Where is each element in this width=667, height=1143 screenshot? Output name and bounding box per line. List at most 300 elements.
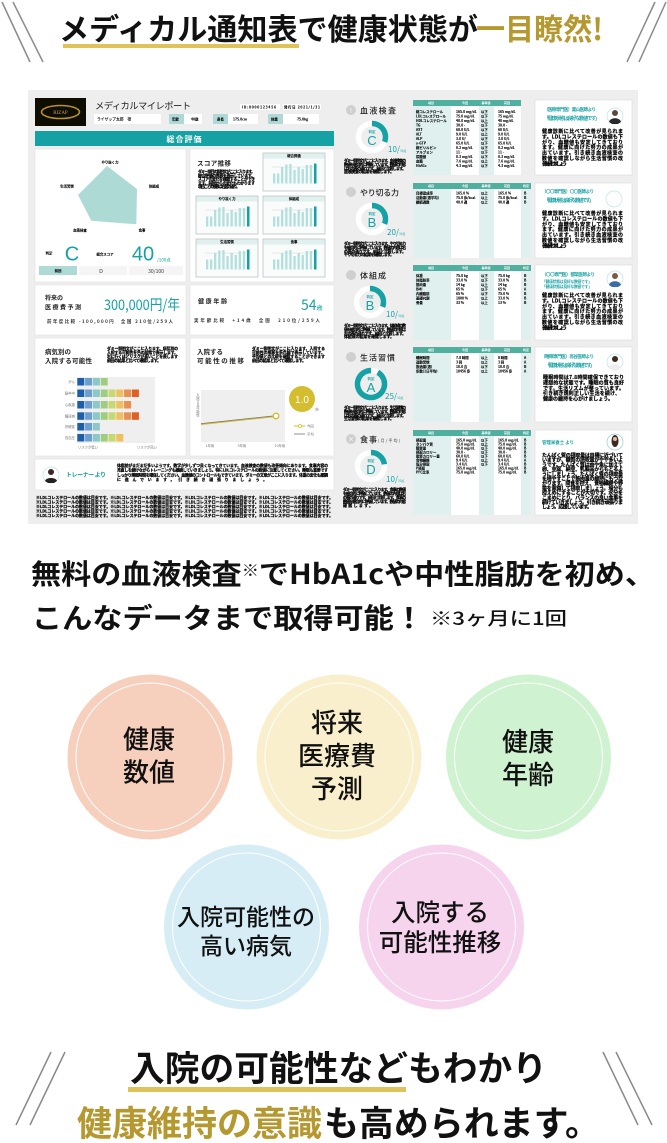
score: blood test: 10/30点 — [388, 144, 406, 155]
table: blood test: γ-GTP — [416, 140, 426, 146]
score: lifestyle: 生活習慣 — [360, 352, 395, 364]
table: blood test: HDLコレステロール — [416, 118, 447, 123]
table: body composition: 以上 — [481, 282, 488, 287]
report header: 40歳 — [191, 116, 199, 122]
table: blood test: 7.6 mg/dL — [498, 158, 515, 164]
table: blood test: TG — [416, 122, 420, 128]
table: body composition: 65 % — [456, 291, 465, 296]
score: lifestyle: 数値を総合的に評価しています。数値の内容 — [344, 409, 406, 415]
logo: RIZAP: RIZAP — [53, 111, 68, 116]
decorative slashes: bottom left — [16, 1052, 65, 1125]
row: blood test — [344, 100, 632, 175]
panel: hospitalization trend line chart — [190, 338, 334, 456]
table: blood test: 65.0 U/L — [456, 140, 470, 146]
table: diet: 9.4 U/L — [498, 458, 510, 462]
heading: closing message — [77, 1041, 600, 1143]
table: diet: 以下 — [481, 438, 488, 442]
doctor card: body composition — [535, 265, 632, 340]
panel: disease risk heat chart: 入院する可能性を色の段階で表示します。 — [107, 350, 178, 356]
score: grit — [344, 187, 406, 258]
table: grit: 以上 — [481, 190, 488, 196]
table: blood test: 65.0 U/L — [498, 140, 512, 146]
panel: hospitalization trend line chart: 5年後 — [238, 443, 247, 448]
text block: intro: 無料の血液検査 — [31, 553, 227, 593]
score: grit: やり切る力の結果を確認します。 — [344, 252, 394, 258]
doctor card: blood test: ます。健康に向けた努力の成果が — [542, 144, 623, 151]
table: lifestyle: 以上 — [481, 368, 488, 374]
table: lifestyle: B — [524, 364, 527, 369]
table: lifestyle — [413, 347, 531, 422]
table: blood test: 0.2 mg/dL — [456, 145, 473, 150]
table: body composition: 骨量 — [416, 300, 423, 305]
panel: future medical cost: 前年度比較 -100,000円 全国 210位/259人 — [47, 318, 174, 325]
doctor card: grit: す。LDLコレステロールの数値も下 — [542, 215, 623, 222]
table: lifestyle: 10.0 合 — [456, 364, 468, 369]
footnote text block: ※LDLコレステロールの数値は目安です。※LDLコレステロールの数値は目安です。※LDLコレステロールの数値は目安です。※LDLコレステロールの数値は目安です。 — [36, 500, 333, 506]
panel: hospitalization trend line chart: 今回 — [307, 423, 314, 428]
table: body composition: 体重 — [416, 273, 423, 278]
table: body composition: 以下 — [481, 278, 488, 282]
table: diet: 75.0 mg/dL — [498, 470, 517, 474]
text block: intro: ※3ヶ月に1回 — [430, 605, 567, 631]
table: body composition: 以下 — [481, 273, 488, 278]
table: body composition: 65 % — [498, 286, 507, 292]
table: grit: 今回 — [462, 183, 468, 188]
panel: hospitalization trend line chart: ダミー説明文がここに入ります。入院する — [252, 346, 325, 352]
panel: hospitalization trend line chart: 倍 — [315, 406, 319, 412]
table: body composition: 13 % — [498, 300, 507, 305]
panel: trainer comment: トレーナー より — [66, 470, 106, 479]
table: blood test: HbA1c — [416, 163, 427, 168]
table: blood test: アルブミン — [416, 150, 433, 154]
doctor card: body composition: がり、血糖値も安定してきており — [542, 303, 623, 310]
table: lifestyle: 歩数(1日平均) — [416, 368, 438, 374]
table: body composition: 今回 — [462, 265, 468, 270]
score: grit: ダミー説明文がここに入ります。やり切る力 — [344, 241, 406, 247]
doctor card: grit: 数値を確認しながら生活習慣の改 — [542, 237, 623, 244]
doctor card: diet: こまめにとり、バランスの良い食事を — [542, 494, 623, 501]
panel: radar chart: 30/100 — [148, 268, 164, 275]
table: blood test: 基準値 — [481, 100, 491, 105]
table: grit: 前回 — [504, 183, 510, 188]
score: grit: 20/30点 — [387, 227, 405, 238]
score: lifestyle: 生活習慣の結果を確認します。 — [344, 416, 394, 422]
table: body composition: 基礎代謝 — [416, 296, 430, 300]
score: blood test: は右の表の通りです。前回と比較します。 — [344, 166, 406, 172]
panel: score trend: 項目ごとの推移は右図の通り。 — [198, 184, 240, 190]
panel: radar chart: C — [65, 244, 79, 266]
doctor card: diet: 続けていきましょう。引き続き頑張りま — [542, 499, 623, 506]
doctor card: body composition: 数値を確認しながら生活習慣の改 — [542, 319, 623, 326]
table: body composition: 33.0 % — [498, 278, 510, 282]
score: grit: の表の通りです。前回と比較します。 — [344, 249, 406, 255]
decorative slashes: bottom right — [603, 1052, 652, 1125]
doctor card: diet: を増やすことで筋肉量の維持にもつな — [542, 476, 623, 482]
doctor card: lifestyle: 睡眠時間は7.8時間確保できており — [543, 374, 624, 381]
table: body composition: 以上 — [481, 296, 488, 300]
table: blood test: AST — [416, 127, 422, 132]
score: lifestyle: 判定 — [368, 376, 375, 382]
table: diet: 食物繊維 — [416, 458, 430, 462]
doctor card: lifestyle: 「健康状態は良好な数値です」 — [545, 362, 595, 369]
table: diet: 3.4 U/L — [456, 462, 468, 466]
score: blood test: C — [367, 133, 377, 148]
table: blood test: 総コレステロール — [416, 109, 443, 114]
panel: health age: 健康年齢 — [198, 296, 227, 306]
panel: disease risk heat chart: 心疾患 — [65, 402, 76, 407]
table: blood test: 以下 — [481, 109, 488, 114]
score: diet: (月/平均) — [378, 438, 400, 444]
table: body composition: B — [524, 273, 527, 278]
circle: high-risk diseases: 高い病気 — [200, 927, 292, 961]
panel: trainer comment: に進んでいます。引き続き頑張りましょう。 — [117, 477, 267, 483]
table: blood test: 血糖 — [416, 158, 423, 164]
table: body composition: A — [523, 286, 527, 292]
score: body composition: 値を総合的に評価しています。数値の内容は — [344, 327, 406, 333]
score: blood test: 判定 — [368, 129, 376, 135]
report header: 175.0cm — [233, 116, 247, 122]
panel: disease risk heat chart: ダミー説明文がここに入ります。病気別の — [107, 346, 178, 352]
circle: future medical cost prediction — [256, 674, 422, 840]
table: grit: 判定 — [523, 183, 529, 188]
doctor card: diet: いますが、糖質の摂取量がやや多いよ — [542, 457, 623, 464]
text block: intro: ※ — [242, 557, 259, 581]
score: lifestyle — [344, 352, 406, 422]
table: diet: 以上 — [481, 442, 488, 446]
table: blood test: 以下 — [481, 154, 488, 159]
panel: radar chart: 総合スコア — [97, 252, 114, 256]
table: diet: 以下 — [481, 454, 488, 458]
doctor card: lifestyle: です。生活リズムが整っています。 — [543, 385, 624, 392]
table: blood test: 0.3 mg/dL — [498, 154, 515, 159]
report header: 75.0kg — [297, 116, 308, 122]
table: diet: 9.4 U/L — [456, 458, 468, 462]
table: blood test: 165 mg/dL — [498, 109, 516, 114]
table: lifestyle: A — [523, 368, 527, 374]
report header: 年齢 — [172, 116, 179, 122]
table: blood test: 11 - — [456, 150, 463, 154]
panel: hospitalization trend line chart: 1年後 — [206, 443, 215, 448]
table: grit: 165.0 % — [498, 190, 512, 196]
doctor card: body composition: （〇〇専門医）都築医師より — [542, 271, 595, 278]
doctor card: diet: うです。たんぱく質は肉や魚に加えて — [542, 461, 623, 468]
circle: high-risk diseases: 入院可能性の — [177, 898, 315, 932]
panel: trainer comment: しっかり睡眠時間を確保してください。血糖値のコントロールもできています。ダミーの文章がここに入ります。体重の変化も順調 — [117, 472, 328, 478]
table: diet: 判定 — [523, 430, 529, 435]
report header: ID:0000123456 — [242, 104, 276, 109]
panel: disease risk heat chart: 前回の結果と比べて確認します。 — [107, 358, 161, 364]
score: diet: × — [348, 434, 354, 444]
doctor card: blood test: 善を続けましょう — [542, 160, 567, 167]
table: diet: 塩分摂取 — [416, 462, 430, 466]
doctor card: lifestyle: 健康の維持を心がけましょう。 — [543, 396, 613, 403]
doctor card: diet: 卵、豆腐、納豆、乳製品からもとるよ — [542, 466, 623, 473]
table: lifestyle: 3 回 — [456, 360, 463, 364]
score: diet — [343, 434, 406, 509]
score: diet: 食事 — [360, 434, 377, 446]
table: lifestyle: 10456 歩 — [498, 368, 513, 374]
mini chart: total score: 総合評価 — [287, 153, 301, 158]
table: lifestyle: 基準値 — [481, 347, 491, 352]
mini chart: diet: 食事 — [291, 239, 298, 244]
table: lifestyle: 10456 歩 — [456, 368, 471, 374]
doctor card: diet: 菜を意識して摂取しましょう。塩分も — [542, 485, 623, 492]
score: lifestyle: A — [367, 380, 376, 395]
text block: intro — [31, 553, 655, 637]
table: lifestyle: 10.0 合 — [498, 364, 510, 369]
table: diet: PFC比率 — [416, 470, 429, 474]
table: diet: 3.4 U/L — [498, 462, 510, 466]
row: diet — [343, 430, 632, 515]
panel: disease risk heat chart: リスクが高い — [137, 444, 158, 450]
table: diet: 165.0 mg/dL — [498, 466, 519, 470]
footnote text block — [36, 495, 333, 519]
score: grit: 判定 — [368, 211, 376, 217]
table: body composition: 33.0 % — [498, 296, 510, 300]
table: blood test: 75 mg/dL — [498, 114, 514, 118]
panel: radar chart — [35, 149, 186, 282]
score: body composition: B — [366, 298, 374, 313]
table: blood test: 以下 — [481, 127, 488, 132]
section bar: overall evaluation: 総合評価 — [166, 134, 202, 145]
panel: disease risk heat chart: 高血圧 — [65, 435, 76, 440]
table: blood test: 以下 — [481, 163, 488, 168]
panel: score trend: ます。前回からの変化もわかります — [198, 180, 255, 186]
panel: health age: 54歳 — [301, 295, 323, 315]
table: body composition: 33 % — [456, 300, 465, 305]
panel: radar chart: 血液検査 — [73, 228, 87, 232]
circle: high-risk diseases — [164, 844, 329, 1010]
table: diet: 40.0 mg/dL — [456, 446, 475, 450]
report header: 発行日 2021/1/31 — [284, 104, 320, 109]
table: diet: B — [524, 454, 527, 458]
score: body composition: 判定 — [366, 294, 374, 300]
panel: hospitalization trend line chart: 1.0 — [295, 395, 309, 406]
text block: intro: でHbA1cや中性脂肪を初め、 — [259, 553, 655, 593]
table: diet: 75.0 mg/dL — [498, 442, 517, 446]
panel: radar chart: /100点 — [157, 258, 171, 264]
table: body composition: B — [524, 282, 527, 287]
table: body composition: 以下 — [481, 286, 488, 292]
table: diet: 以下 — [481, 462, 488, 466]
table: blood test: 前回 — [504, 100, 510, 105]
table: blood test — [413, 100, 521, 175]
doctor card: lifestyle — [535, 347, 632, 422]
panel: hospitalization trend line chart: 可能性の推移を折れ線で表示しています。 — [252, 350, 325, 356]
table: diet: 摂取量 — [416, 438, 426, 442]
score: diet: 数値を総合的に評価しています。数値の内容 — [343, 499, 406, 505]
table: body composition: 前回 — [504, 265, 510, 270]
panel: disease risk heat chart: 肝硬変 — [65, 424, 76, 429]
circle: health values — [68, 674, 232, 840]
panel: score trend: 総合評価の推移を表示しています。 — [198, 173, 255, 179]
panel: disease risk heat chart: リスクが低い — [78, 444, 99, 450]
mini chart: lifestyle: 生活習慣 — [220, 239, 234, 244]
table: blood test: 60 U/L — [498, 127, 509, 132]
table: diet: 30.0 - — [456, 450, 466, 454]
table: grit: B — [524, 195, 527, 200]
table: blood test: 以上 — [481, 118, 488, 123]
score: body composition: 体組成の結果を確認します。 — [344, 334, 394, 340]
score: body composition: 右の表の通りです。前回と比較します。 — [344, 331, 406, 337]
doctor card: grit: 善を続けましょう — [542, 242, 567, 249]
score: blood test: 数値を総合的に評価しています。数値の内容 — [344, 162, 406, 168]
table: body composition: 以上 — [481, 300, 488, 305]
table: body composition: 14 kg — [456, 282, 465, 287]
table: diet: 基準値 — [481, 430, 491, 435]
table: body composition: B — [524, 291, 527, 296]
text block: intro: こんなデータまで取得可能！ — [32, 597, 424, 637]
table: blood test: 40 mg/dL — [498, 118, 514, 123]
table: diet: B — [524, 438, 527, 442]
table: lifestyle: A — [523, 360, 527, 364]
report header — [94, 98, 321, 124]
table: body composition: 1800 % — [456, 296, 469, 300]
score: diet: を総合的に評価しています。数値の内容は右 — [343, 491, 406, 497]
table: grit: 75.0 歩/kcal — [498, 195, 517, 200]
table: diet: 60.0 U/L — [456, 454, 470, 458]
panel: trainer comment: 体脂肪がまだまだ多いようです。数字が少しずつ良くなってきています。血液検査の数値も改善傾向にあります。食事内容の — [117, 463, 328, 469]
decorative slashes: top right — [627, 2, 666, 62]
panel: trainer comment: 見直しを続けながらトレーニングも継続していきましょう。特にLDLコレステロールの数値に注意してください。睡眠も重要です — [117, 468, 328, 474]
table: diet — [413, 430, 531, 515]
table: diet: B — [524, 442, 527, 446]
doctor card: grit — [535, 183, 632, 258]
row: body composition — [344, 265, 632, 340]
doctor card: blood test: 出ています。引き続き血液検査の — [542, 150, 623, 157]
table: lifestyle: 前回 — [504, 347, 510, 352]
table: grit: 以上 — [481, 200, 488, 204]
panel: health age: 実年齢比較 +14歳 全国 210位/259人 — [194, 317, 320, 324]
panel: future medical cost — [35, 285, 186, 335]
table: diet: B — [524, 470, 527, 474]
table: body composition: B — [524, 296, 527, 300]
table: grit: 活動量(週平均) — [416, 195, 439, 200]
report header: 体重 — [271, 116, 278, 122]
row: lifestyle — [344, 347, 632, 422]
score: body composition — [344, 270, 406, 340]
table: diet: P摂取 — [416, 466, 425, 470]
circle: hospitalization trend: 可能性推移 — [379, 924, 501, 959]
doctor card: lifestyle: 理想的な状態です。睡眠の質も良好 — [543, 379, 624, 386]
table: lifestyle: 飲酒量(週) — [416, 364, 432, 369]
panel: future medical cost: 300,000円/年 — [104, 294, 180, 315]
table: diet: A — [523, 458, 527, 462]
report header: ライザップ太郎 様 — [97, 116, 131, 122]
table: blood test: 0.2 mg/dL — [498, 145, 515, 150]
circle: health values: 健康 — [123, 720, 175, 756]
score: body composition: 10/30点 — [386, 309, 404, 320]
panel: future medical cost: 医療費予測 — [45, 302, 81, 312]
panel: radar chart: 体組成 — [149, 184, 160, 188]
table: blood test: 40.0 mg/dL — [456, 118, 475, 123]
table: blood test: 0.3 mg/dL — [456, 154, 473, 159]
panel: hospitalization trend line chart: 平均値との比較を確認することができます — [252, 354, 325, 360]
score: grit: を総合的に評価しています。数値の内容は右 — [344, 245, 406, 251]
score: diet: 判定 — [368, 458, 375, 464]
mini chart: body composition: 体組成 — [289, 196, 300, 201]
table: diet: 糖質量 — [416, 446, 426, 450]
doctor card: blood test: 健康診断に比べて改善が見られま — [542, 128, 623, 135]
table: blood test: ALT — [416, 132, 422, 136]
table: body composition: 65 % — [456, 286, 465, 292]
table: grit: 40.0 週 — [456, 200, 468, 204]
panel: score trend: ダミー項目の説明文がここに入ります。 — [198, 169, 255, 175]
footnote text block: ※LDLコレステロールの数値は目安です。※LDLコレステロールの数値は目安です。※LDLコレステロールの数値は目安です。※LDLコレステロールの数値は目安です。 — [36, 513, 333, 519]
table: diet: 以下 — [481, 450, 488, 454]
table: diet: B — [524, 466, 527, 470]
table: body composition: 筋肉量 — [416, 282, 426, 287]
doctor card: blood test: （医療専門医）栗山医師より — [544, 106, 596, 113]
table: blood test: LDLコレステロール — [416, 114, 446, 118]
table: diet: 今回 — [462, 430, 468, 435]
score: grit: やり切る力 — [360, 188, 399, 198]
mini chart: diet — [263, 239, 325, 277]
heading: top title: メディカル通知表で健康状態が — [59, 5, 478, 49]
score: blood test: ダミー説明文がここに入ります。血液検査の — [344, 158, 406, 164]
panel: hospitalization trend line chart: 入院する — [197, 346, 223, 356]
doctor card: body composition: 「健康状態は良好な数値です」 — [542, 284, 592, 290]
doctor card: diet: 管理栄養士 より — [542, 439, 574, 446]
doctor card: grit: 「健康状態は良好な数値です」 — [544, 197, 594, 204]
doctor card: lifestyle: （睡眠専門医）高谷医師より — [541, 353, 594, 360]
row: grit — [344, 183, 632, 258]
table: blood test: 項目 — [428, 100, 434, 105]
doctor card: grit: 出ています。引き続き血液検査の — [542, 232, 623, 239]
doctor card: grit: （〇〇専門医）〇〇医師より — [542, 188, 594, 195]
doctor card: body composition: ます。健康に向けた努力の成果が — [542, 308, 623, 315]
score: lifestyle: は右の表の通りです。前回と比較します。 — [344, 413, 406, 419]
table: blood test: 4.3 mg/dL — [498, 163, 515, 168]
table: blood test: 165.0 mg/dL — [456, 109, 477, 114]
table: lifestyle: 以下 — [481, 364, 488, 369]
table: blood test: 7.6 mg/dL — [456, 158, 473, 164]
table: diet: 以下 — [481, 446, 488, 450]
circle: hospitalization trend — [359, 844, 524, 1010]
panel: disease risk heat chart: 病気別の — [45, 346, 72, 356]
panel: radar chart: 前回 — [55, 268, 62, 273]
table: body composition: B — [524, 278, 527, 282]
table: body composition: 75.0 % — [498, 291, 510, 296]
table: lifestyle: A — [523, 355, 527, 360]
table: grit: 75.0 歩/kcal — [456, 195, 475, 200]
score: blood test — [344, 105, 406, 175]
table: body composition: 内臓脂肪 — [416, 291, 430, 296]
table: blood test: 総ビリルビン — [416, 145, 436, 150]
table: blood test: 以上 — [481, 158, 488, 164]
panel: health age — [190, 285, 334, 335]
footnote text block: ※LDLコレステロールの数値は目安です。※LDLコレステロールの数値は目安です。※LDLコレステロールの数値は目安です。※LDLコレステロールの数値は目安です。 — [36, 495, 333, 501]
score: blood test: ! — [350, 106, 352, 114]
table: diet: 40.0 mg/dL — [498, 446, 517, 450]
mini chart: grit: やり抜く力 — [219, 196, 236, 201]
doctor card: diet: うにしましょう。たんぱく質の摂取量 — [542, 471, 623, 478]
heading: top title: 一目瞭然! — [476, 5, 603, 49]
table: lifestyle: 8 時間 — [498, 355, 508, 360]
table: diet: 75.0 mg/dL — [456, 470, 475, 474]
table: body composition: 75.0 kg — [456, 273, 468, 278]
panel: medical report image — [28, 90, 638, 524]
table: body composition: 75.0 kg — [498, 273, 510, 278]
table: body composition: B — [524, 300, 527, 305]
table: blood test: 30.0 - — [456, 122, 466, 128]
doctor card: diet — [535, 430, 632, 515]
panel: trainer comment — [35, 459, 334, 490]
footnote text block: ※LDLコレステロールの数値は目安です。※LDLコレステロールの数値は目安です。※LDLコレステロールの数値は目安です。※LDLコレステロールの数値は目安です。 — [36, 508, 333, 514]
panel: radar chart: 食事 — [139, 228, 146, 232]
panel: disease risk heat chart: がん — [68, 379, 76, 384]
table: lifestyle: 以上 — [481, 355, 488, 360]
